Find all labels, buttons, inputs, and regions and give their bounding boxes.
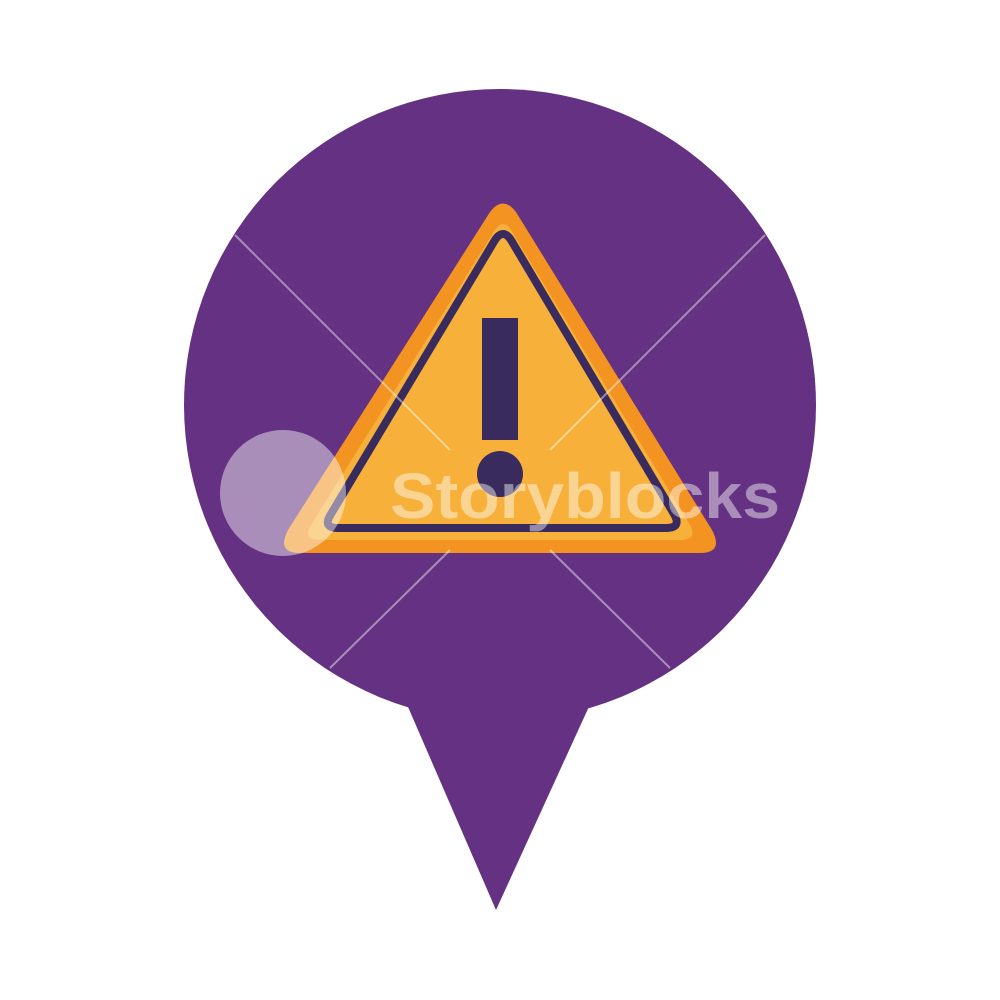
watermark: Storyblocks <box>390 460 780 532</box>
pin marker <box>184 89 816 910</box>
watermark <box>220 235 780 668</box>
exclamation mark <box>477 318 523 497</box>
icon: warning triangle <box>284 204 716 553</box>
